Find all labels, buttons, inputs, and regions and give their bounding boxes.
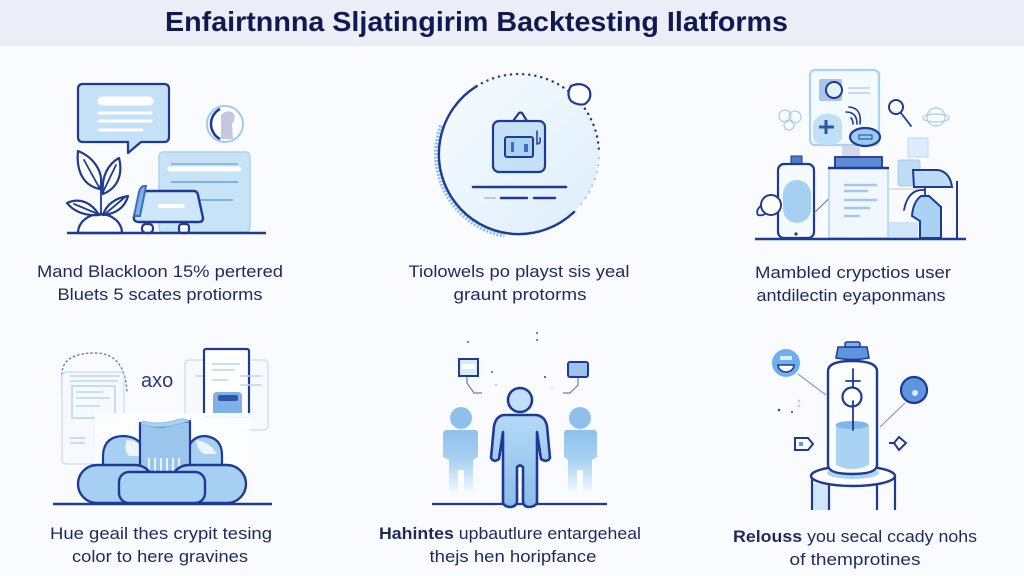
caption 5: thejs hen horipfance <box>430 547 596 566</box>
caption 3: antdilectin eyaponmans <box>756 286 946 305</box>
icon: circle disc <box>436 74 599 236</box>
icon: tag <box>795 438 813 450</box>
panel: devices illustration <box>755 70 966 239</box>
caption 3: Mambled crypctios user <box>755 263 951 282</box>
panel: circular dial illustration <box>436 74 599 236</box>
icon: phone <box>778 156 842 238</box>
icon: cart <box>134 186 203 233</box>
icon: right pale document <box>185 349 268 432</box>
icon: left circle badge <box>772 349 826 395</box>
baseline <box>432 503 607 505</box>
icon: clipboard document <box>828 146 889 238</box>
caption 1 <box>37 262 283 304</box>
icon: right person <box>564 407 597 491</box>
caption 2: graunt protorms <box>454 285 586 304</box>
caption 6: Relouss you secal ccady nohs <box>733 527 977 546</box>
icon: speech bubble <box>78 84 169 153</box>
icon: center person <box>491 388 550 507</box>
icon: cloud cushion <box>78 419 246 503</box>
icon: left pale document <box>62 353 127 464</box>
caption 6 <box>733 527 977 569</box>
icon: small round badge <box>207 106 243 142</box>
icon: pale right glyph <box>923 108 949 126</box>
icon: pale stacked boxes <box>888 138 928 238</box>
baseline <box>53 503 272 505</box>
baseline <box>67 232 266 234</box>
caption 2 <box>408 262 630 304</box>
caption 5 <box>379 524 641 566</box>
icon: round tag <box>757 195 781 215</box>
icon: small head marker <box>568 84 590 105</box>
panel: chat and cart illustration <box>67 84 266 233</box>
baseline <box>755 238 966 240</box>
icon: screen box <box>493 112 545 172</box>
icon: pale left glyph <box>779 110 801 130</box>
icon: plant <box>67 151 128 233</box>
icon: diamond <box>889 437 906 450</box>
icon: floating card <box>810 70 880 146</box>
title: Enfairtnnna Sljatingirim Backtesting Ilatforms <box>165 6 788 37</box>
caption 4: color to here gravines <box>72 547 248 566</box>
caption 6: of themprotines <box>790 550 920 569</box>
pale translucent sheet <box>95 413 250 473</box>
icon: cylinder <box>828 342 877 474</box>
label: axo: axo <box>141 370 173 392</box>
decorative dots <box>467 332 553 390</box>
icon: document card <box>159 152 250 232</box>
icon: left person <box>443 407 478 491</box>
caption 1: Mand Blackloon 15% pertered <box>37 262 283 281</box>
caption 1: Bluets 5 scates protiorms <box>58 285 262 304</box>
title band <box>0 0 1024 46</box>
icon: table stand <box>811 466 895 510</box>
caption 5: Hahintes upbautlure entargeheal <box>379 524 641 543</box>
icon: spray bottle <box>904 170 957 238</box>
caption 4 <box>50 524 272 566</box>
icon: magnifier <box>889 100 911 126</box>
text lines <box>473 187 566 198</box>
caption 4: Hue geail thes crypit tesing <box>50 524 272 543</box>
panel: cylinder illustration <box>772 342 927 510</box>
icon: right circle badge <box>880 377 927 427</box>
icon: right monitor <box>563 362 588 393</box>
panel: people illustration <box>432 332 607 507</box>
caption 2: Tiolowels po playst sis yeal <box>408 262 630 281</box>
icon: left monitor <box>459 359 482 393</box>
caption 3 <box>755 263 951 305</box>
panel: cloud and documents illustration <box>53 349 272 504</box>
decorative dots <box>778 400 800 413</box>
